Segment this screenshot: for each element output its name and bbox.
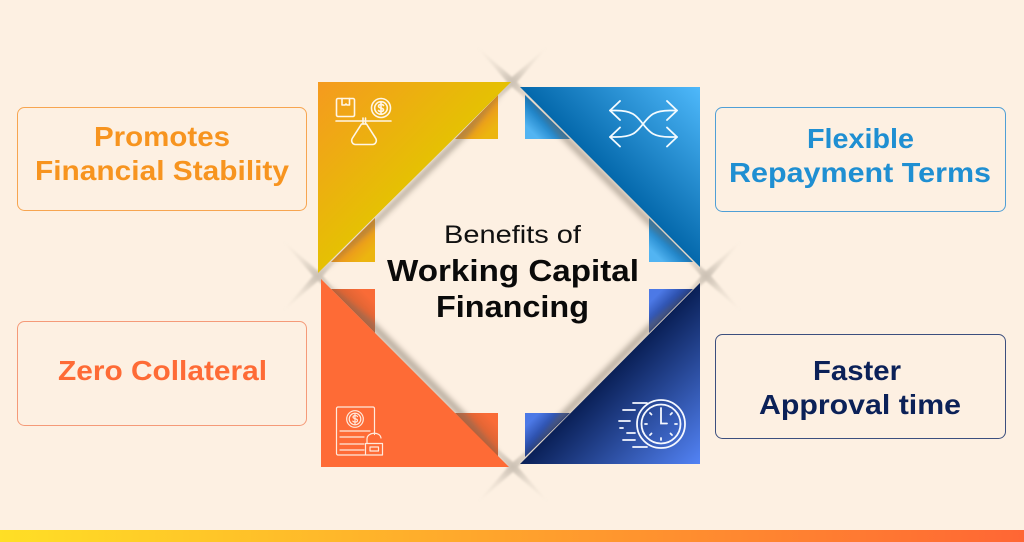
icon: fast clock: [619, 400, 685, 448]
panel: navy corner: [520, 283, 700, 464]
triangle: [520, 87, 700, 267]
icon: document with coin and padlock: [336, 407, 382, 455]
card: Faster Approval time: Faster: [813, 355, 901, 386]
bottom gradient bar: [0, 530, 1024, 542]
title: [387, 221, 639, 324]
card: Faster Approval time: [716, 334, 1006, 438]
triangle: [520, 283, 700, 464]
icon: scale with box and coin: [336, 98, 391, 144]
card: Flexible Repayment Terms: [716, 108, 1006, 212]
card: Flexible Repayment Terms: Flexible: [807, 123, 914, 154]
corner flare: right: [670, 240, 742, 312]
corner flare: bottom: [477, 431, 549, 503]
title: Financing: [436, 289, 589, 324]
fold tabs: [525, 289, 693, 457]
fold shadow: [521, 89, 700, 268]
triangle: [318, 82, 511, 273]
card: Promotes Financial Stability: [18, 108, 306, 210]
card: Zero Collateral: Zero Collateral: [58, 355, 267, 386]
fold tabs: [331, 95, 498, 262]
fold shadow: [320, 84, 510, 274]
card: Promotes Financial Stability: Promotes: [94, 121, 230, 152]
corner flare: left: [282, 240, 354, 312]
panel: yellow corner: [318, 82, 511, 274]
card: Promotes Financial Stability: Financial Stability: [35, 155, 289, 186]
icon: crossing arrows: [610, 101, 677, 146]
triangle: [321, 279, 509, 467]
fold shadow: [322, 280, 510, 467]
card: Faster Approval time: Approval time: [759, 389, 961, 420]
title: Working Capital: [387, 253, 639, 288]
card: Zero Collateral: [18, 322, 306, 426]
panel: orange corner: [321, 279, 510, 467]
fold tabs: [525, 95, 693, 262]
card: Flexible Repayment Terms: Repayment Terms: [729, 157, 991, 188]
fold tabs: [331, 289, 498, 457]
fold shadow: [520, 284, 698, 463]
corner flare: top: [476, 46, 548, 118]
panel: blue corner: [520, 87, 700, 268]
title: Benefits of: [444, 221, 581, 249]
